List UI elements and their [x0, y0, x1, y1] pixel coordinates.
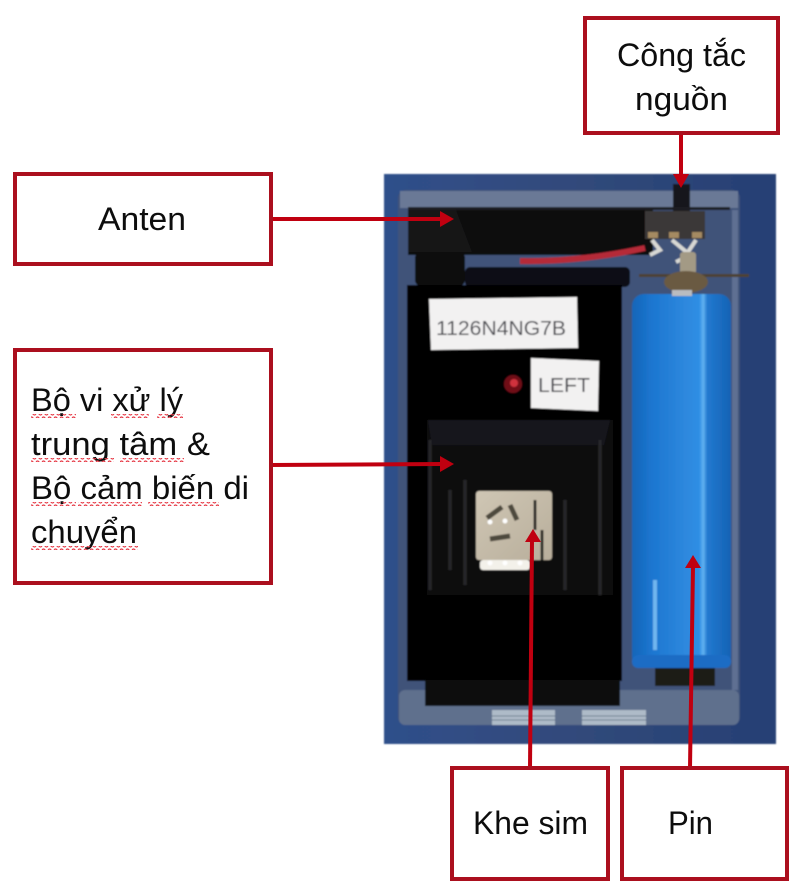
- device photo: [384, 174, 776, 744]
- transparent case: [398, 190, 740, 725]
- bottom tabs: [492, 710, 646, 725]
- label box: power switch: [585, 18, 778, 133]
- label box: CPU and motion sensor: trung tâm &: [31, 426, 210, 462]
- lower black strip: [425, 680, 620, 706]
- case inner wall right: [732, 210, 738, 690]
- arrow: SIM slot: [525, 529, 541, 768]
- arrow: battery: [685, 555, 701, 768]
- label box: CPU and motion sensor: Bộ cảm biến di: [31, 470, 249, 506]
- label box: CPU and motion sensor: [15, 350, 271, 583]
- main black block: [407, 285, 622, 681]
- label box: CPU and motion sensor: Bộ vi xử lý: [31, 382, 183, 418]
- red wire: [520, 248, 645, 261]
- photo backdrop: [384, 174, 776, 744]
- LED: [504, 375, 522, 393]
- label box: power switch: Công tắc: [617, 37, 746, 73]
- label box: SIM slot: Khe sim: [473, 805, 588, 841]
- label box: SIM slot: [452, 768, 608, 879]
- label box: antenna: [15, 174, 271, 264]
- battery contact: [655, 666, 715, 686]
- label box: CPU and motion sensor: chuyển: [31, 514, 137, 550]
- serial label: [429, 297, 578, 350]
- label box: antenna: Anten: [98, 201, 186, 237]
- label box: battery: [622, 768, 787, 879]
- LEFT label: LEFT: [538, 375, 590, 397]
- label box: power switch: nguồn: [635, 81, 728, 117]
- battery: [632, 290, 731, 668]
- LEFT label: [531, 358, 599, 411]
- antenna: [408, 207, 653, 287]
- case top rim: [400, 191, 738, 208]
- arrow: antenna: [271, 211, 454, 227]
- arrow: power switch: [673, 132, 689, 188]
- arrow: CPU: [271, 456, 454, 472]
- case bottom rim: [399, 690, 739, 725]
- SIM slot: [476, 491, 552, 570]
- CPU and motion sensor module: [427, 420, 613, 595]
- label box: battery: Pin: [668, 805, 713, 841]
- serial label: 1126N4NG7B: [436, 318, 566, 340]
- power switch: [408, 184, 749, 293]
